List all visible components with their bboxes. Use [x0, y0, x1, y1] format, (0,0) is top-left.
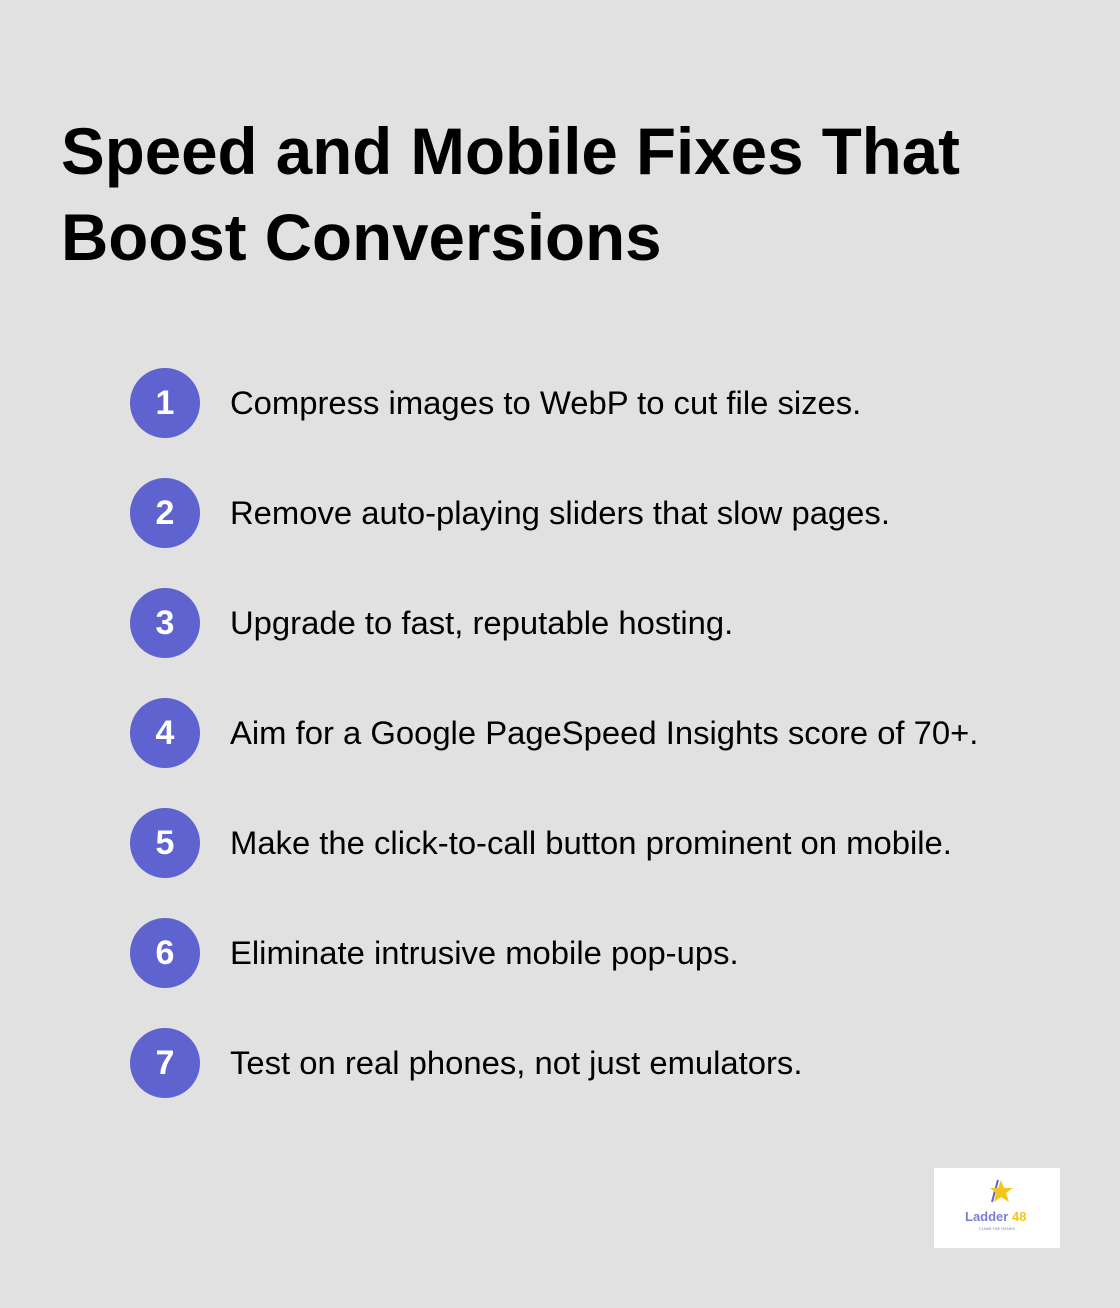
item 5: 5: [156, 824, 174, 862]
item 6: 6: [156, 934, 174, 972]
logo: [934, 1168, 1060, 1248]
item 7: 7: [156, 1044, 174, 1082]
item 7: [130, 1028, 802, 1098]
item 1: [130, 368, 861, 438]
item 6: [130, 918, 739, 988]
item 5: Make the click-to-call button prominent on mobile.: [230, 824, 952, 861]
item 2: Remove auto-playing sliders that slow pages.: [230, 494, 890, 531]
item 7: Test on real phones, not just emulators.: [230, 1044, 802, 1081]
item 1: Compress images to WebP to cut file sizes.: [230, 384, 861, 421]
item 3: [130, 588, 733, 658]
title: Speed and Mobile Fixes That: [61, 115, 960, 188]
item 4: Aim for a Google PageSpeed Insights score of 70+.: [230, 714, 978, 751]
title: [61, 115, 960, 274]
item 3: Upgrade to fast, reputable hosting.: [230, 604, 733, 641]
item 1: 1: [156, 384, 174, 422]
item 6: Eliminate intrusive mobile pop-ups.: [230, 934, 739, 971]
item 2: [130, 478, 890, 548]
item 3: 3: [156, 604, 174, 642]
item 4: [130, 698, 978, 768]
logo: CLIMB THE RANKS: [979, 1226, 1015, 1231]
title: Boost Conversions: [61, 201, 662, 274]
logo: Ladder 48: [965, 1209, 1026, 1224]
item 5: [130, 808, 952, 878]
item 2: 2: [156, 494, 174, 532]
item 4: 4: [156, 714, 174, 752]
